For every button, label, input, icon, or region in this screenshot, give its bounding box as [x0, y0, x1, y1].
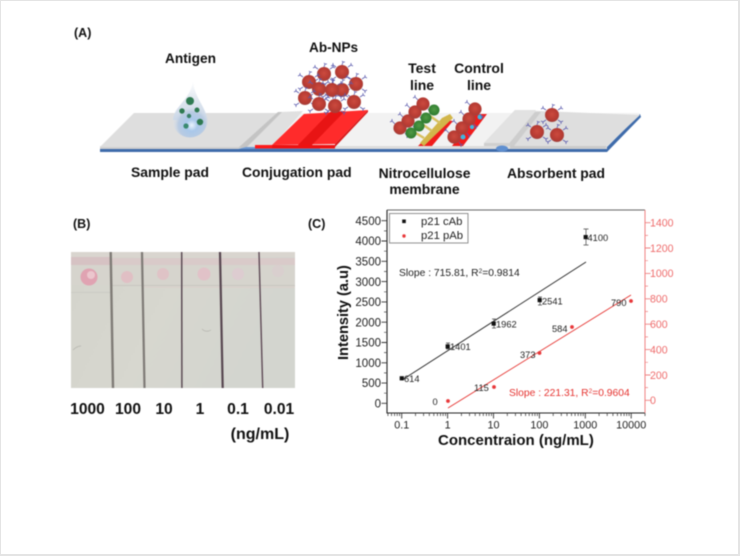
x axis tick labels: 10000 — [616, 420, 646, 432]
conjugation pad — [255, 110, 368, 148]
icon: antigen droplet — [172, 80, 208, 138]
panel label B: (B) — [73, 217, 90, 231]
Ab-NPs cluster — [294, 61, 367, 115]
p21 pAb series: 0 — [432, 397, 438, 407]
right axis tick labels — [650, 218, 674, 407]
panel C: dual axis chart — [308, 210, 674, 449]
p21 pAb series — [432, 295, 633, 408]
panel A: lateral flow strip diagram — [74, 26, 641, 197]
label: Control line: Control — [454, 60, 504, 76]
panel label C: (C) — [308, 217, 325, 231]
label: Nitrocellulose membrane: Nitrocellulose — [379, 165, 471, 181]
control line — [444, 100, 487, 147]
right axis tick labels: 1200 — [650, 243, 674, 255]
concentration labels: 1000 — [70, 401, 105, 418]
x axis tick labels — [394, 420, 646, 432]
left axis tick labels — [355, 216, 381, 410]
concentration labels: 10 — [155, 401, 173, 418]
label: Antigen: Antigen — [165, 51, 216, 66]
test line — [390, 95, 453, 146]
sample spots — [80, 265, 284, 286]
legend: p21 cAb — [421, 216, 462, 228]
slope annotation cAb: 2 — [479, 268, 483, 275]
right axis tick labels: 1000 — [650, 268, 674, 280]
x axis title: Concentraion (ng/mL) — [438, 432, 594, 449]
legend: p21 pAb — [421, 230, 463, 242]
strip base backing — [100, 113, 641, 152]
p21 cAb series: 4100 — [588, 233, 608, 243]
legend — [390, 214, 468, 243]
p21 cAb series: 2541 — [542, 296, 563, 306]
p21 cAb series: 1962 — [496, 320, 517, 330]
label: Test line: Test — [408, 60, 436, 76]
p21 cAb series: 614 — [404, 374, 420, 384]
slope annotation cAb: =0.9814 — [482, 268, 520, 279]
x axis tick labels: 1000 — [573, 420, 597, 432]
strip photo — [71, 252, 295, 388]
slope annotation cAb: Slope : 715.81, R — [399, 268, 479, 279]
left axis tick labels: 4000 — [355, 236, 381, 248]
slope annotation pAb: 2 — [589, 388, 593, 395]
label: Control line: line — [467, 77, 491, 93]
right axis tick labels: 0 — [650, 395, 656, 407]
concentration labels: 100 — [115, 401, 141, 418]
x axis tick labels: 1 — [445, 420, 451, 432]
label: Sample pad: Sample pad — [131, 164, 209, 180]
left axis tick labels: 2000 — [355, 317, 381, 329]
p21 cAb series — [400, 229, 608, 384]
absorbent pad — [484, 110, 640, 152]
concentration labels: 0.1 — [227, 401, 249, 418]
concentration labels: 0.01 — [264, 401, 294, 418]
unit label: (ng/mL) — [231, 426, 289, 443]
left axis tick labels: 0 — [375, 398, 381, 410]
panel label A: (A) — [74, 26, 91, 40]
label: Nitrocellulose membrane: membrane — [389, 181, 460, 197]
right axis tick labels: 200 — [650, 370, 668, 382]
p21 pAb series: 584 — [552, 324, 568, 334]
left axis tick labels: 2500 — [355, 297, 381, 309]
p21 pAb series: 373 — [520, 350, 536, 360]
right axis tick labels: 400 — [650, 344, 668, 356]
sample pad — [100, 111, 320, 149]
x axis tick labels: 10 — [487, 420, 500, 432]
x axis tick labels: 0.1 — [394, 420, 409, 432]
left axis tick labels: 3500 — [355, 256, 381, 268]
p21 cAb series: 1401 — [450, 342, 471, 352]
concentration labels: 1 — [196, 401, 205, 418]
left axis tick labels: 1500 — [355, 338, 381, 350]
slope annotation pAb: Slope : 221.31, R — [509, 388, 589, 399]
y axis title: Intensity (a.u) — [336, 265, 352, 360]
x axis tick labels: 100 — [530, 420, 548, 432]
p21 pAb series: 115 — [474, 383, 489, 393]
left axis tick labels: 1000 — [355, 358, 381, 370]
left axis tick labels: 3000 — [355, 277, 381, 289]
label: Conjugation pad: Conjugation pad — [242, 164, 352, 180]
right axis tick labels: 600 — [650, 319, 668, 331]
captured nanoparticles on absorbent pad — [526, 104, 568, 144]
right axis tick labels: 800 — [650, 294, 668, 306]
chart axes — [382, 210, 650, 418]
slope annotation pAb: =0.9604 — [592, 388, 630, 399]
panel B: test strip photograph — [70, 217, 295, 443]
left axis tick labels: 500 — [362, 378, 381, 390]
label: Test line: line — [410, 77, 434, 93]
right axis tick labels: 1400 — [650, 218, 674, 230]
left axis tick labels: 4500 — [355, 216, 381, 228]
p21 pAb series: 790 — [611, 298, 627, 308]
concentration labels — [70, 401, 294, 418]
label: Ab-NPs: Ab-NPs — [309, 40, 358, 55]
strip separators — [73, 252, 263, 388]
label: Absorbent pad: Absorbent pad — [507, 165, 605, 181]
